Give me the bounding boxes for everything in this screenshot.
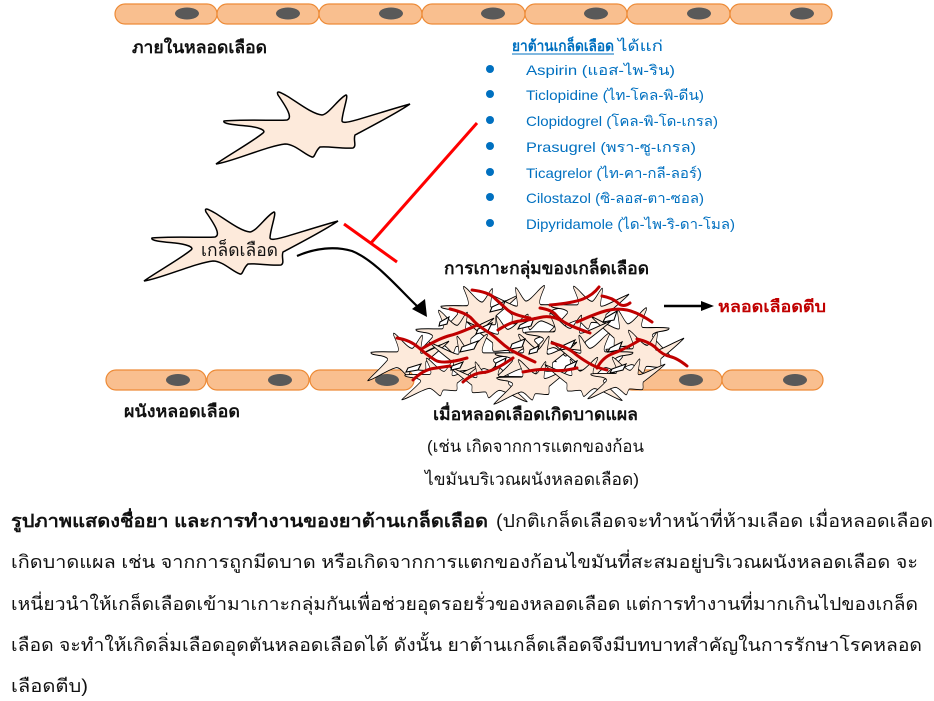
antiplatelet drug list: Cilostazol (ซิ-ลอส-ตา-ซอล): [526, 190, 704, 206]
label: when the vessel is injured: (เช่น เกิดจากการแตกของก้อน: [427, 437, 644, 456]
platelet with label: เกล็ดเลือด: [201, 238, 278, 260]
label: narrowed artery: หลอดเลือดตีบ: [718, 297, 826, 316]
caption: เลือดตีบ): [11, 676, 88, 696]
platelet with label: [144, 209, 338, 281]
list heading: ได้แก่: [617, 37, 663, 55]
antiplatelet drug list: Prasugrel (พรา-ซู-เกรล): [526, 139, 696, 156]
caption: เลือด จะทำให้เกิดลิ่มเลือดอุดตันหลอดเลือดได้ ดังนั้น ยาต้านเกล็ดเลือดจึงมีบทบาทสำคัญในการรักษาโรคหลอด: [11, 632, 922, 656]
caption: [11, 508, 933, 696]
antiplatelet drug list: Ticagrelor (ไท-คา-กลี-ลอร์): [526, 165, 702, 181]
antiplatelet drug list: Aspirin (แอส-ไพ-ริน): [526, 62, 675, 78]
label: when the vessel is injured: [423, 402, 644, 489]
antiplatelet drug list: Dipyridamole (ได-ไพ-ริ-ดา-โมล): [526, 216, 735, 232]
caption: รูปภาพแสดงชื่อยา และการทำงานของยาต้านเกล็ดเลือด: [11, 508, 488, 533]
list heading: [512, 36, 663, 55]
icon: resting platelet: [216, 92, 410, 164]
fibrin strands: [397, 287, 687, 382]
arrow: narrowed artery: [664, 301, 714, 311]
white gaps between platelets: [406, 301, 626, 373]
antiplatelet drug list: Clopidogrel (โคล-พิ-โด-เกรล): [526, 113, 718, 129]
top blood vessel wall: [115, 4, 832, 24]
caption: เหนี่ยวนำให้เกล็ดเลือดเข้ามาเกาะกลุ่มกันเพื่อช่วยอุดรอยรั่วของหลอดเลือด แต่การทำงานที่มากเกินไปของเกล็ด: [11, 591, 918, 615]
label: platelet aggregation: การเกาะกลุ่มของเกล็ดเลือด: [444, 256, 649, 279]
antiplatelet drug list: [486, 36, 735, 232]
label: inside blood vessel: ภายในหลอดเลือด: [132, 37, 267, 57]
caption: (ปกติเกล็ดเลือดจะทำหน้าที่ห้ามเลือด เมื่อหลอดเลือด: [496, 508, 933, 531]
arrow: platelet to aggregation: [297, 248, 427, 317]
bottom blood vessel wall: [106, 370, 823, 390]
antiplatelet drug list: Ticlopidine (ไท-โคล-พิ-ดีน): [526, 87, 704, 103]
inhibition symbol: [344, 123, 477, 262]
label: blood vessel wall: ผนังหลอดเลือด: [124, 401, 240, 421]
list heading: ยาต้านเกล็ดเลือด: [512, 36, 614, 55]
platelet aggregate: [368, 286, 684, 404]
label: when the vessel is injured: เมื่อหลอดเลือดเกิดบาดแผล: [433, 402, 638, 424]
label: when the vessel is injured: ไขมันบริเวณผนังหลอดเลือด): [423, 469, 639, 489]
caption: เกิดบาดแผล เช่น จากการถูกมีดบาด หรือเกิดจากการแตกของก้อนไขมันที่สะสมอยู่บริเวณผนังหลอดเลือด จะ: [11, 549, 918, 573]
